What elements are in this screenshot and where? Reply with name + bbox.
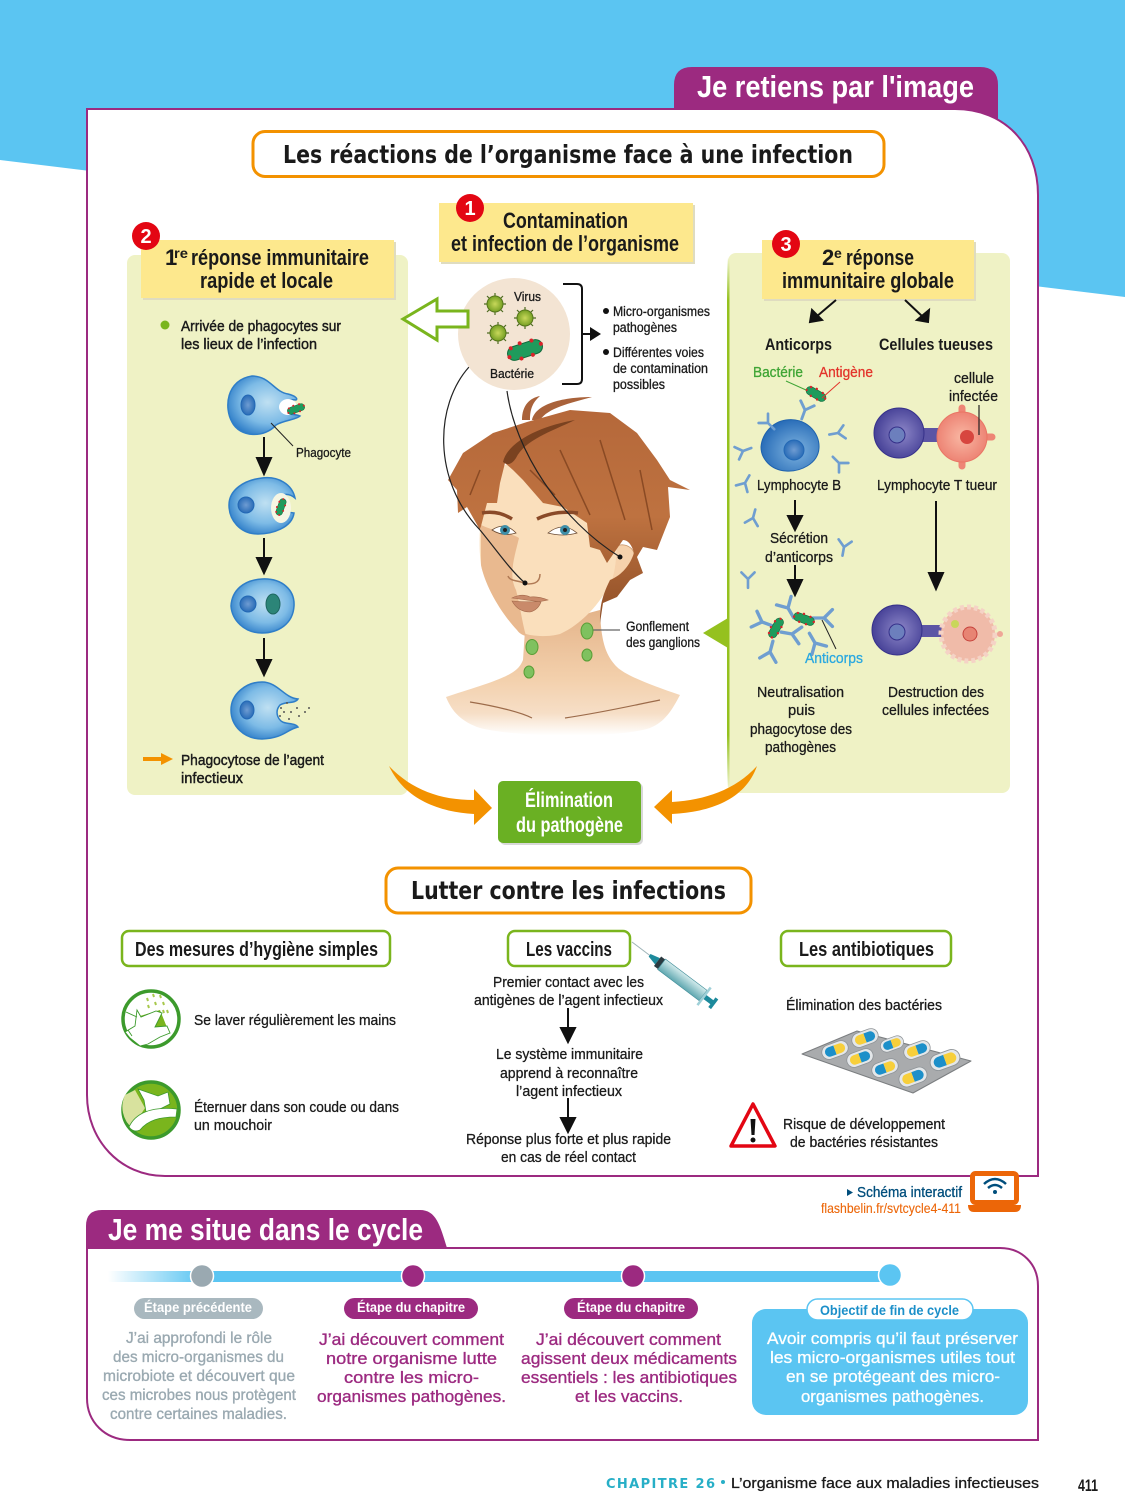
lymphocyte B illustration: Bactérie — [753, 364, 803, 381]
column: étape précédente: ces microbes nous protègent — [102, 1387, 297, 1404]
text: arrivée de phagocytes: Arrivée de phagocytes sur — [181, 318, 341, 335]
text: sécrétion d'anticorps: d’anticorps — [765, 549, 833, 566]
neutralisation illustration — [751, 597, 863, 667]
circle: virus and bacteria: Virus — [514, 289, 541, 304]
badge 2: 2 — [140, 226, 152, 248]
title: Les réactions — [253, 132, 884, 176]
column: étape du chapitre 1 — [317, 1298, 506, 1406]
nose — [508, 574, 540, 584]
mouth — [512, 595, 548, 612]
text: éternuer — [194, 1099, 399, 1134]
footer — [606, 1475, 1098, 1495]
illustration: boy head and neck — [444, 367, 690, 736]
column: objectif de fin de cycle: les micro-organismes utiles tout — [770, 1348, 1015, 1367]
heading: 1re réponse: rapide et locale — [200, 268, 333, 293]
text: neutralisation: phagocytose des — [750, 721, 852, 738]
column: objectif de fin de cycle: en se protégeant des micro- — [786, 1367, 1000, 1386]
ear — [608, 545, 634, 582]
heading: vaccins: Les vaccins — [526, 939, 612, 961]
panel: contamination heading: et infection de l’organisme — [451, 231, 679, 256]
text: risque de développement: Risque de développement — [783, 1116, 946, 1133]
column: étape précédente: contre certaines maladies. — [110, 1406, 287, 1423]
face shadow — [481, 525, 526, 636]
heading: hygiène: Des mesures d’hygiène simples — [135, 939, 378, 961]
text: micro-organismes: possibles — [613, 377, 665, 392]
text: système immunitaire: apprend à reconnaître — [500, 1065, 638, 1082]
tab: je me situe dans le cycle: Je me situe dans le cycle — [108, 1212, 423, 1247]
icon: warning — [731, 1104, 775, 1146]
hair — [448, 410, 690, 623]
arrow: hollow green to phagocytes — [403, 299, 468, 340]
heading: 1re réponse: re — [174, 245, 188, 261]
box: élimination du pathogène: Élimination — [525, 789, 613, 812]
lymphocyte T illustration: cellule — [954, 370, 994, 387]
icon: hand washing — [123, 991, 179, 1047]
footer: 411 — [1078, 1476, 1098, 1495]
heading: 2e réponse: réponse — [846, 245, 914, 270]
text: réponse plus forte — [466, 1131, 671, 1166]
icon: blister of capsules — [802, 1027, 971, 1093]
title: Les réactions: Les réactions de l’organisme face à une infection — [283, 140, 853, 169]
heading: 1re réponse: réponse immunitaire — [191, 245, 369, 270]
text: éternuer: Éternuer dans son coude ou dans — [194, 1099, 399, 1116]
column: étape précédente: J’ai approfondi le rôle — [126, 1330, 272, 1347]
text: gonflement des ganglions: Gonflement — [626, 619, 689, 634]
arrows from heading — [810, 300, 929, 322]
heading: antibiotiques — [781, 931, 951, 966]
text: gonflement des ganglions — [626, 619, 700, 650]
section: vaccins — [466, 931, 721, 1166]
text: éternuer: un mouchoir — [194, 1117, 272, 1134]
text: se laver les mains: Se laver régulièrement les mains — [194, 1012, 396, 1029]
text: micro-organismes: de contamination — [613, 361, 708, 376]
destruction illustration — [872, 605, 1003, 661]
text: premier contact — [474, 974, 663, 1009]
link: schéma interactif: Schéma interactif — [857, 1185, 963, 1201]
text: arrivée de phagocytes: les lieux de l’infection — [181, 336, 317, 353]
panel: contamination heading: Contamination — [503, 208, 628, 233]
text: premier contact: Premier contact avec les — [493, 974, 644, 991]
column: objectif de fin de cycle: Objectif de fin de cycle — [820, 1302, 959, 1318]
panel: second immune response — [703, 230, 1010, 793]
bracket and arrow — [562, 284, 601, 384]
lymphocyte T illustration: infectée — [949, 388, 998, 405]
text: neutralisation: Neutralisation — [757, 684, 844, 701]
panel: contamination heading — [439, 194, 695, 264]
arrow — [788, 500, 802, 530]
hair parting shadow — [503, 420, 575, 464]
arrow — [561, 1008, 575, 1042]
heading: antibiotiques: Les antibiotiques — [799, 939, 934, 961]
phagocyte stage 3 — [231, 579, 294, 633]
text: arrivée de phagocytes — [160, 318, 341, 353]
panel: cycle — [87, 1248, 1038, 1440]
column: étape du chapitre 2: agissent deux médicaments — [521, 1349, 737, 1368]
text: risque de développement — [783, 1116, 946, 1151]
neck and shoulders — [446, 610, 680, 736]
badge 2 — [132, 222, 160, 250]
text: destruction: cellules infectées — [882, 702, 989, 719]
timeline — [108, 1264, 902, 1288]
badge 1: 1 — [464, 198, 476, 220]
text: micro-organismes: Différentes voies — [613, 345, 704, 360]
text: neutralisation — [750, 684, 852, 756]
column: étape du chapitre 2: et les vaccins. — [575, 1387, 683, 1406]
text: gonflement des ganglions: des ganglions — [626, 635, 700, 650]
neutralisation illustration: Anticorps — [805, 651, 863, 667]
lymphocyte B illustration: Antigène — [819, 364, 873, 381]
text: système immunitaire: l’agent infectieux — [516, 1083, 622, 1100]
link: schéma interactif — [821, 1174, 1021, 1216]
heading: 2e réponse — [762, 240, 976, 301]
text: système immunitaire — [496, 1046, 643, 1100]
panel: first immune response — [127, 222, 408, 795]
column: étape du chapitre 1: contre les micro- — [344, 1368, 479, 1387]
column: étape du chapitre 2: Étape du chapitre — [577, 1299, 685, 1315]
arrow: orange left — [389, 766, 492, 825]
eyebrows — [482, 512, 578, 519]
heading: 2e réponse: e — [834, 245, 842, 261]
column: étape du chapitre 2: essentiels : les antibiotiques — [521, 1368, 737, 1387]
badge 3 — [772, 230, 800, 258]
arrow — [561, 1098, 575, 1132]
tab: Je retiens par l'image: Je retiens par l'image — [697, 69, 974, 104]
legend: phagocytose: Phagocytose de l’agent — [181, 752, 325, 769]
lymphocyte T illustration: Lymphocyte T tueur — [877, 477, 997, 494]
text: réponse plus forte: en cas de réel contact — [501, 1149, 637, 1166]
title: lutter contre les infections — [386, 868, 751, 913]
box: élimination du pathogène — [498, 781, 643, 845]
section: hygiene — [122, 931, 399, 1138]
column: objectif de fin de cycle: Avoir compris qu’il faut préserver — [767, 1329, 1018, 1348]
text: micro-organismes — [603, 304, 710, 392]
text: destruction — [882, 684, 989, 719]
face — [480, 458, 616, 636]
arrow — [257, 638, 271, 675]
column: étape du chapitre 2 — [521, 1298, 737, 1406]
lymphocyte B illustration — [735, 364, 873, 588]
text: neutralisation: puis — [788, 702, 815, 719]
column: étape précédente: Étape précédente — [144, 1299, 252, 1315]
text: premier contact: antigènes de l’agent infectieux — [474, 992, 663, 1009]
heading: cellules tueuses: Cellules tueuses — [879, 335, 993, 354]
heading: hygiène — [122, 931, 390, 966]
icon: sneezing — [122, 1082, 179, 1138]
pointer lines — [444, 367, 620, 583]
text: sécrétion d'anticorps: Sécrétion — [770, 530, 828, 547]
text: sécrétion d'anticorps — [765, 530, 833, 566]
column: objectif de fin de cycle: organismes pathogènes. — [801, 1387, 984, 1406]
text: neutralisation: pathogènes — [765, 739, 836, 756]
lymphocyte T illustration — [874, 370, 998, 494]
text: système immunitaire: Le système immunitaire — [496, 1046, 643, 1063]
text: réponse plus forte: Réponse plus forte et plus rapide — [466, 1131, 671, 1148]
icon: laptop wifi — [968, 1174, 1021, 1212]
heading: 2e réponse: 2 — [822, 245, 834, 270]
column: étape du chapitre 1: organismes pathogènes. — [317, 1387, 506, 1406]
heading: anticorps: Anticorps — [765, 335, 832, 354]
heading: 1re réponse — [141, 240, 396, 300]
text: risque de développement: de bactéries résistantes — [790, 1134, 938, 1151]
footer: CHAPITRE 26 — [606, 1477, 715, 1492]
heading: vaccins — [508, 931, 630, 966]
circle: virus and bacteria: Bactérie — [490, 366, 534, 381]
lymphocyte B illustration: Lymphocyte B — [757, 477, 841, 494]
blue background band — [0, 0, 1125, 297]
section: antibiotiques — [731, 931, 971, 1151]
column: étape précédente: des micro-organismes du — [113, 1349, 284, 1366]
arrow — [257, 538, 271, 573]
column: étape du chapitre 1: Étape du chapitre — [357, 1299, 465, 1315]
tab: Je retiens par l'image — [674, 67, 998, 125]
phagocyte stage 1 — [228, 376, 351, 460]
legend: phagocytose: infectieux — [181, 770, 243, 787]
link: schéma interactif: flashbelin.fr/svtcycle4-411 — [821, 1200, 961, 1216]
arrow — [257, 437, 271, 474]
hair wisp — [522, 396, 592, 420]
heading: 1re réponse: 1 — [165, 245, 177, 270]
column: étape du chapitre 1: J’ai découvert comment — [319, 1330, 504, 1349]
column: étape précédente — [102, 1298, 297, 1423]
phagocyte stage 4 — [231, 682, 310, 739]
phagocyte stage 2 — [229, 478, 295, 534]
heading: 2e réponse: immunitaire globale — [782, 268, 954, 293]
phagocyte stage 1: Phagocyte — [296, 445, 351, 460]
arrow — [788, 565, 802, 595]
column: étape du chapitre 1: notre organisme lutte — [326, 1349, 497, 1368]
column: étape du chapitre 2: J’ai découvert comment — [536, 1330, 721, 1349]
legend: phagocytose — [143, 752, 325, 787]
ganglions — [524, 623, 620, 678]
badge 1 — [456, 194, 484, 222]
eyes — [492, 526, 577, 535]
box: élimination du pathogène: du pathogène — [516, 814, 623, 837]
text: micro-organismes: Micro-organismes — [613, 304, 710, 319]
footer: L’organisme face aux maladies infectieuses — [731, 1475, 1039, 1492]
arrow: orange right — [654, 766, 757, 824]
text: destruction: Destruction des — [888, 684, 984, 701]
panel: main frame — [87, 109, 1038, 1176]
column: objectif de fin de cycle — [752, 1299, 1028, 1415]
text: micro-organismes: pathogènes — [613, 320, 677, 335]
icon: syringe — [625, 933, 721, 1013]
title: lutter contre les infections: Lutter contre les infections — [411, 876, 726, 905]
column: étape précédente: microbiote et découvert que — [103, 1368, 295, 1385]
arrow — [929, 501, 943, 589]
text: élimination des bactéries: Élimination des bactéries — [786, 997, 942, 1014]
circle: virus and bacteria — [458, 278, 570, 390]
badge 3: 3 — [780, 234, 792, 256]
